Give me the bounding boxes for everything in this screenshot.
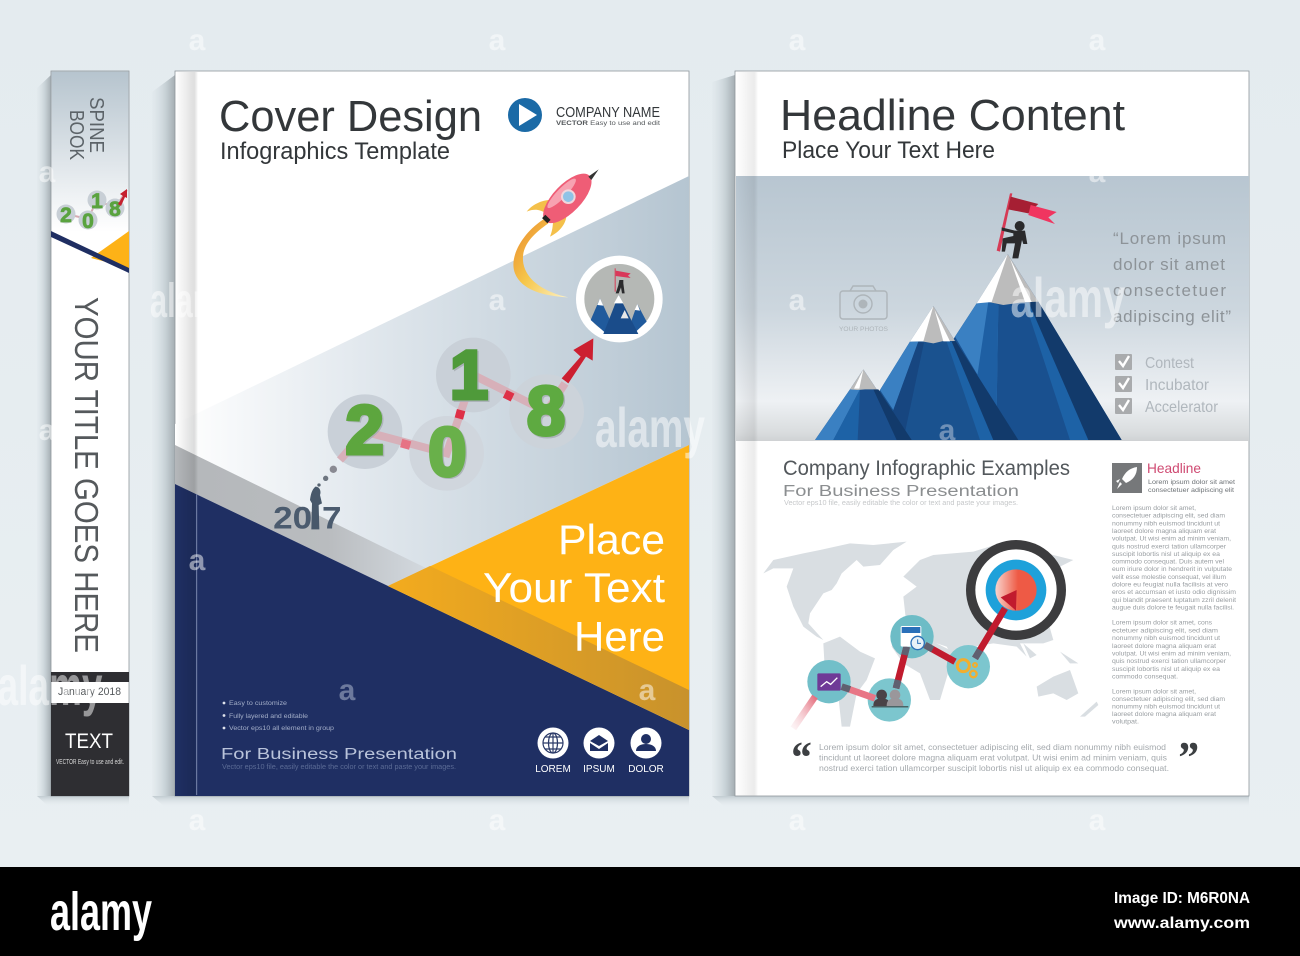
digit shadows: 1 <box>451 339 489 415</box>
body text: volutpat. Ut wisi enim ad minim veniam, <box>1112 650 1231 658</box>
body text: Lorem ipsum dolor sit amet, cons <box>1112 620 1213 627</box>
mini 2018 chart: 0 <box>82 210 94 233</box>
checklist: Incubator <box>1145 377 1210 394</box>
stock watermarks: a <box>789 804 806 837</box>
cover drop shadow <box>152 75 175 796</box>
icon labels <box>535 764 664 775</box>
body text: commodo consequat. <box>1112 674 1178 681</box>
rocket flame <box>513 218 568 297</box>
panel: front cover <box>175 71 689 796</box>
line ends <box>842 645 980 689</box>
sidebar intro: Lorem ipsum dolor sit amet <box>1148 479 1235 486</box>
opening quote mark: “ <box>789 733 811 782</box>
2018 growth chart <box>273 338 593 536</box>
spine footer text: TEXT <box>65 730 113 753</box>
badge ring <box>576 256 663 342</box>
cover gold fold <box>388 566 689 730</box>
icon: company logo <box>508 98 542 132</box>
body text: suscipit lobortis nisl ut aliquip ex ea <box>1112 551 1220 558</box>
stock watermarks: a <box>489 156 506 189</box>
section subheading: For Business Presentation <box>783 483 1019 500</box>
footer quote text <box>819 742 1169 773</box>
body text: qui blandit praesent luptatum zzril delenit <box>1112 597 1236 604</box>
climber and flag <box>997 193 1057 258</box>
icon: rocket tile <box>1112 463 1142 493</box>
cover footer heading: For Business Presentation <box>221 746 457 763</box>
icon labels: IPSUM <box>583 764 615 775</box>
checklist: Contest <box>1145 355 1194 372</box>
arrowhead <box>1001 590 1017 611</box>
stock watermarks: a <box>1089 804 1106 837</box>
cover callout text: Place <box>558 516 665 563</box>
body text: augue duis dolore te feugait nulla facilisi. <box>1112 604 1234 612</box>
body text: Lorem ipsum dolor sit amet, <box>1112 505 1196 512</box>
body text: laoreet dolore magna aliquam erat <box>1112 528 1216 535</box>
cover spine fold <box>176 72 198 796</box>
digit shadows <box>347 339 566 492</box>
checklist: Accelerator <box>1145 399 1219 416</box>
big peak snow <box>977 254 1038 305</box>
rocket fins <box>527 200 550 213</box>
cover bullet list <box>223 700 334 732</box>
dotted path <box>317 466 337 487</box>
cover title: Cover Design <box>219 92 482 141</box>
spine yellow triangle <box>91 231 129 268</box>
subheadline: Place Your Text Here <box>782 137 995 164</box>
back page drop shadow <box>712 75 735 796</box>
stock watermarks: alamy <box>0 654 102 717</box>
body text: quis nostrud exerci tation ullamcorper <box>1112 658 1227 665</box>
body text: eum iriure dolor in hendrerit in vulputate <box>1112 566 1232 573</box>
target <box>966 540 1066 640</box>
panel: back page <box>735 71 1249 796</box>
company name: COMPANY NAME <box>556 104 660 121</box>
mini 2018 chart: 1 <box>91 190 103 213</box>
body text: Lorem ipsum dolor sit amet, <box>1112 689 1196 696</box>
middle mountain <box>847 306 1018 440</box>
body text: nonummy nibh euismod tincidunt ut <box>1112 520 1220 527</box>
body text: commodo consequat. Duis autem vel <box>1112 559 1225 566</box>
mini 2018 chart: 8 <box>109 198 121 221</box>
mini 2018 chart <box>56 189 127 233</box>
progress line <box>793 697 815 728</box>
cover navy area <box>175 484 689 796</box>
digits 2018: 0 <box>428 414 466 490</box>
icon: globe <box>538 728 568 758</box>
closing quote mark: ” <box>1176 733 1198 782</box>
footer quote text: nostrud exerci tation ullamcorper suscipit lobortis nisl ut aliquip ex ea commodo consequat. <box>819 763 1169 773</box>
quote: “Lorem ipsum <box>1113 229 1226 248</box>
icon: envelope <box>584 728 614 758</box>
page base <box>735 71 1249 796</box>
footer logo: alamy <box>50 882 152 942</box>
spine date band <box>51 672 129 682</box>
connecting path <box>340 375 565 460</box>
mountains <box>815 193 1122 440</box>
badge mountains <box>591 298 614 334</box>
goal badge <box>576 256 663 342</box>
body text: ectetuer adipiscing elit, sed diam <box>1112 627 1219 634</box>
body text: laoreet dolore magna aliquam erat <box>1112 643 1216 650</box>
spine bottom shadow <box>37 796 129 806</box>
stock watermarks: a <box>339 674 356 707</box>
spine drop shadow <box>37 75 51 796</box>
headline: Headline Content <box>780 91 1125 140</box>
footer quote text: Lorem ipsum dolor sit amet, consectetuer adipiscing elit, sed diam nonummy nibh euismod <box>819 742 1166 752</box>
icon: calendar clock <box>901 626 924 650</box>
target and progress chart <box>793 540 1066 728</box>
spine top gradient <box>52 72 128 232</box>
digits 2018: 2 <box>346 392 384 468</box>
cover bullet list: Vector eps10 all element in group <box>229 725 334 732</box>
body text <box>1112 505 1237 726</box>
middle peak snow <box>910 306 955 343</box>
cover bullet list: Easy to customize <box>229 700 287 707</box>
stock watermarks: a <box>789 24 806 57</box>
spine label: BOOK <box>65 110 87 161</box>
quote: adipiscing elit” <box>1113 307 1231 326</box>
rocket nozzle <box>542 215 551 223</box>
rocket window <box>561 189 576 204</box>
stock watermarks <box>0 24 1126 837</box>
stock watermarks: alam <box>150 275 220 328</box>
icon: people <box>872 690 908 707</box>
cover callout text: Your Text <box>483 564 665 611</box>
section heading: Company Infographic Examples <box>783 457 1070 480</box>
footer image id: Image ID: M6R0NA <box>1114 890 1250 907</box>
sidebar intro: consectetuer adipiscing elit <box>1148 487 1234 494</box>
spine navy stripe <box>51 231 129 273</box>
stock watermarks: a <box>939 414 956 447</box>
stock watermarks: a <box>489 804 506 837</box>
digit shadows: 8 <box>528 375 566 451</box>
icon: chart <box>817 673 841 691</box>
body text: nonummy nibh euismod tincidunt ut <box>1112 635 1220 642</box>
page fold <box>736 72 758 796</box>
small mountain <box>815 369 912 440</box>
body text: nonummy nibh euismod tincidunt ut <box>1112 704 1220 711</box>
cover footer note: Vector eps10 file, easily editable the color or text and paste your images. <box>222 764 456 771</box>
spine base <box>51 71 129 796</box>
body text: consectetuer adipiscing elit, sed diam <box>1112 513 1226 520</box>
body text: volutpat. <box>1112 719 1139 726</box>
arrow to goal <box>562 338 593 383</box>
stock watermarks: a <box>189 24 206 57</box>
rocket body <box>535 166 599 231</box>
stock watermarks: a <box>189 544 206 577</box>
stock watermarks: a <box>639 674 656 707</box>
stock watermarks: a <box>489 24 506 57</box>
cover grey band <box>175 445 430 586</box>
rocket nose <box>588 169 599 180</box>
company tagline: VECTOR Easy to use and edit <box>556 121 660 127</box>
spine label: SPINE <box>85 97 107 153</box>
cover base <box>175 71 689 796</box>
icon: person <box>630 728 662 758</box>
checklist <box>1115 354 1219 416</box>
quote: consectetuer <box>1113 281 1226 300</box>
section note: Vector eps10 file, easily editable the color or text and paste your images. <box>784 500 1018 507</box>
number backdrops <box>328 394 402 469</box>
cover callout text <box>483 516 665 660</box>
icon labels: LOREM <box>535 764 571 775</box>
spine label <box>65 97 107 161</box>
photo band <box>736 176 1249 441</box>
badge figure and flag <box>614 268 617 292</box>
body text: consectetuer adipiscing elit, sed diam <box>1112 696 1226 703</box>
body text: eros et accumsan et iusto odio dignissim <box>1112 589 1237 596</box>
stock watermarks: alamy <box>1010 266 1126 329</box>
cover yellow area <box>388 445 689 730</box>
quote: dolor sit amet <box>1113 255 1225 274</box>
body text: volutpat. Ut wisi enim ad minim veniam, <box>1112 536 1231 543</box>
digit shadows: 0 <box>430 416 468 492</box>
sidebar intro <box>1148 479 1235 494</box>
body text: quis nostrud exerci tation ullamcorper <box>1112 543 1227 550</box>
footer quote text: tincidunt ut laoreet dolore magna aliquam erat volutpat. Ut wisi enim ad minim veniam, quis <box>819 752 1167 762</box>
year 2017: 20 7 <box>273 501 341 536</box>
stock watermarks: a <box>39 414 56 447</box>
icon labels: DOLOR <box>628 764 664 775</box>
back page bottom shadow <box>712 796 1249 807</box>
spine date: January 2018 <box>58 686 121 698</box>
cover callout text: Here <box>574 613 665 660</box>
sidebar heading: Headline <box>1147 460 1201 476</box>
panel: book spine <box>51 71 129 796</box>
cover fold line <box>196 494 197 795</box>
small peak snow <box>850 369 877 390</box>
footer website: www.alamy.com <box>1113 915 1250 932</box>
footer bar <box>0 867 1300 956</box>
spine dark footer <box>51 703 129 796</box>
digits 2018 <box>346 338 565 490</box>
cover diagonal blue-grey area <box>175 176 689 586</box>
digit shadows: 2 <box>347 394 385 470</box>
body text: velit esse molestie consequat, vel illum <box>1112 574 1226 581</box>
stock watermarks: a <box>789 284 806 317</box>
red markers <box>400 390 514 450</box>
big mountain <box>893 254 1122 440</box>
stock watermarks: a <box>1089 156 1106 189</box>
world map <box>763 542 1098 727</box>
spine title: YOUR TITLE GOES HERE <box>68 297 105 653</box>
quote <box>1113 229 1231 326</box>
digits 2018: 8 <box>527 374 565 450</box>
spine footer small text: VECTOR Easy to use and edit. <box>56 759 124 766</box>
body text: dolore eu feugiat nulla facilisis at vero <box>1112 582 1228 588</box>
body text: laoreet dolore magna aliquam erat <box>1112 711 1216 718</box>
photo placeholder caption: YOUR PHOTOS <box>839 326 889 333</box>
digits 2018: 1 <box>450 338 488 414</box>
cover bullet list: Fully layered and editable <box>229 713 308 720</box>
cover subtitle: Infographics Template <box>220 138 450 165</box>
icon: gears <box>957 660 977 677</box>
icon: photo placeholder <box>840 286 887 319</box>
mini 2018 chart: 2 <box>60 204 72 227</box>
stock watermarks: alamy <box>595 396 705 459</box>
body text: suscipit lobortis nisl ut aliquip ex ea <box>1112 666 1220 673</box>
step circles <box>807 660 851 703</box>
stock watermarks: a <box>39 156 56 189</box>
stock watermarks: a <box>489 284 506 317</box>
stock watermarks: a <box>1089 24 1106 57</box>
icon: rocket <box>513 166 599 297</box>
stock watermarks: a <box>189 804 206 837</box>
figure silhouette <box>310 487 322 529</box>
cover bottom shadow <box>152 796 689 807</box>
